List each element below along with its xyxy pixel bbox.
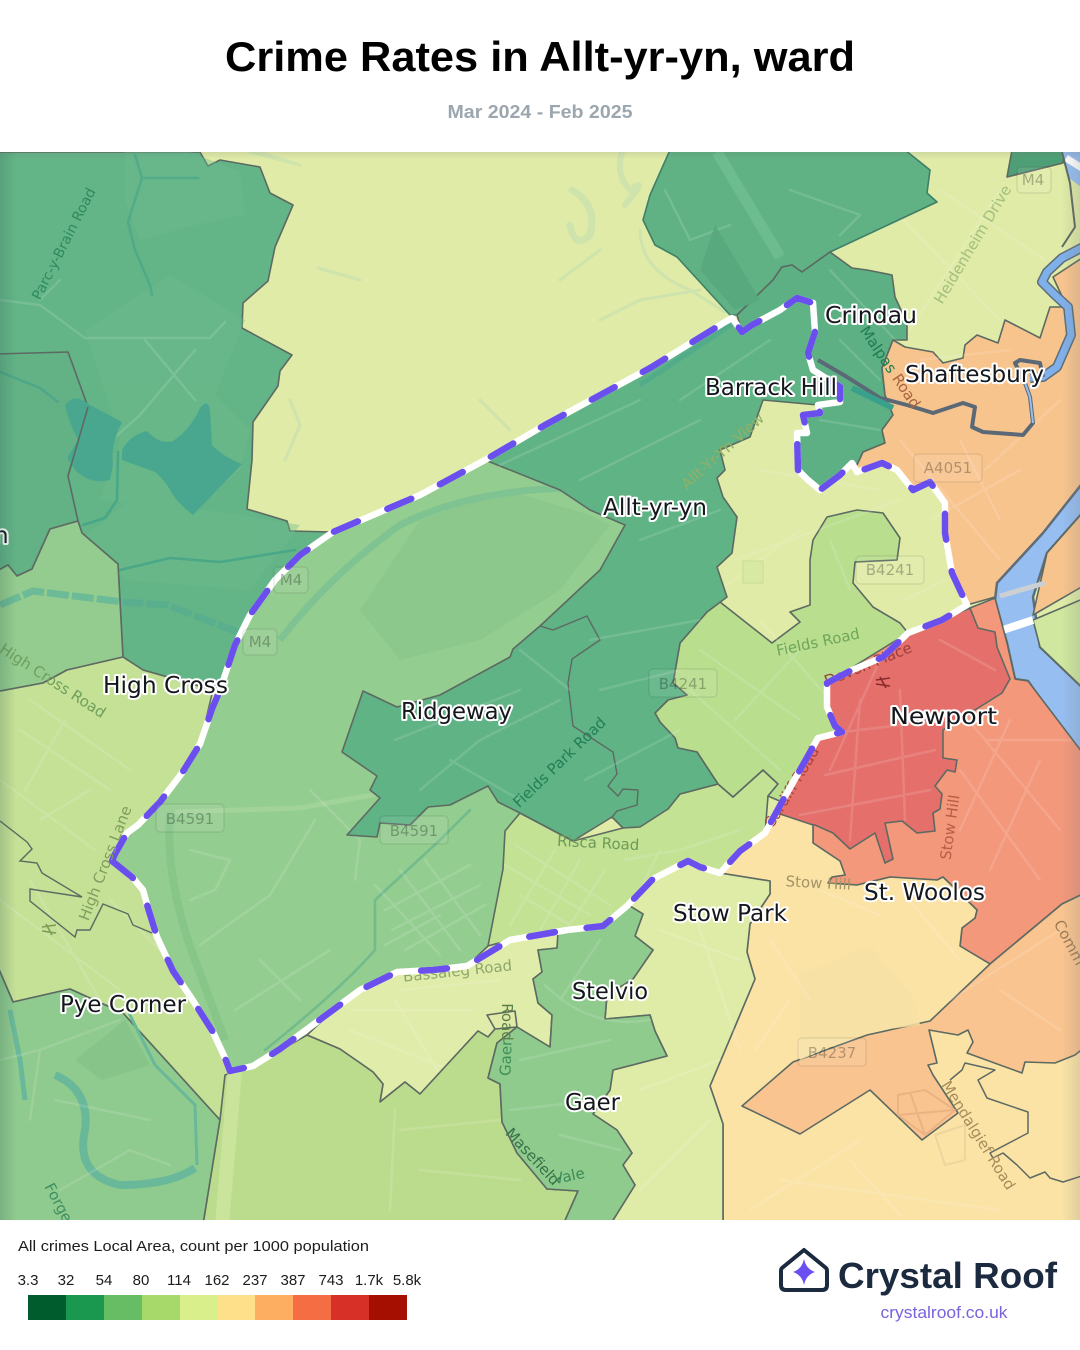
road shields: B4237 xyxy=(808,1044,856,1062)
region: Stow Park pale green xyxy=(593,861,770,1225)
legend tick labels: 1.7k xyxy=(355,1272,384,1289)
brand url: crystalroof.co.uk xyxy=(880,1304,1008,1322)
title: Crime Rates in Allt-yr-yn, ward xyxy=(225,33,855,80)
road label: Bassaleg Road: Bassaleg Road xyxy=(402,956,513,986)
legend tick labels: 237 xyxy=(242,1272,268,1289)
road shields: A4051 xyxy=(924,459,972,477)
place labels: Stelvio xyxy=(572,979,648,1005)
region: Ridgeway inner shading xyxy=(169,488,610,1050)
place labels xyxy=(0,303,1044,1116)
region: Crindau road and streets xyxy=(665,152,900,430)
road shields: B4241 xyxy=(866,561,914,579)
legend tick labels: 3.3 xyxy=(18,1272,38,1289)
road labels under boundary xyxy=(402,639,915,986)
region: south light green xyxy=(203,1027,578,1225)
region: Stelvio and Gaer green xyxy=(488,906,667,1225)
place labels: Newport xyxy=(890,704,997,730)
region: south-west light green High Cross xyxy=(0,521,123,692)
region: Fields Road streets xyxy=(690,540,850,770)
road labels: Forge xyxy=(41,1180,76,1225)
icon: Pye Corner railway station xyxy=(42,924,56,935)
region: St. Woolos salmon xyxy=(780,598,1080,964)
road labels: Stow Hill xyxy=(937,794,964,861)
region: Risca Road streets xyxy=(505,830,740,930)
legend title: All crimes Local Area, count per 1000 population xyxy=(18,1238,369,1255)
legend tick labels: 80 xyxy=(133,1272,149,1289)
region: peach across river xyxy=(1033,510,1080,615)
road labels: Allt-Yr-Yn View xyxy=(678,409,768,493)
region: hidden ward lines High Cross xyxy=(0,821,152,937)
river: upper channel xyxy=(1030,246,1080,378)
region: Stow Park yellow peach xyxy=(710,802,1080,1225)
region: south light road xyxy=(222,1070,235,1225)
legend tick labels: 114 xyxy=(167,1272,191,1289)
region: M4 carriageway over High Cross xyxy=(0,591,123,605)
region: Ridgeway street grid xyxy=(375,860,485,955)
region: lighter patches xyxy=(80,152,300,590)
choropleth map panel xyxy=(0,150,1080,1225)
region: M4 carriageway west xyxy=(123,599,239,635)
legend tick labels: 54 xyxy=(96,1272,112,1289)
region: peach south band xyxy=(742,893,1080,1140)
region: Allt-yr-yn and Ridgeway dark green wards xyxy=(342,298,840,841)
road shields: B4591 xyxy=(166,810,214,828)
legend xyxy=(18,1238,422,1320)
legend colour scale xyxy=(28,1295,407,1320)
road label: Devon Place: Devon Place xyxy=(822,639,915,690)
region: Crindau top dark green xyxy=(643,150,937,315)
region: Shaftesbury streets xyxy=(900,350,1060,560)
place labels: Shaftesbury xyxy=(905,362,1044,388)
region: St. Woolos streets xyxy=(960,710,1070,880)
road labels: Malpas Road xyxy=(856,323,924,412)
region: south street details xyxy=(750,890,1060,1215)
region: Newport red xyxy=(780,608,1010,863)
region: west dark green xyxy=(0,152,333,690)
place labels: Pye Corner xyxy=(60,992,187,1018)
road labels: Road xyxy=(498,1003,516,1041)
legend tick labels xyxy=(18,1272,422,1289)
road shields: M4 xyxy=(280,571,302,589)
road shields xyxy=(156,167,1051,1066)
region: Shaftesbury peach xyxy=(852,256,1080,605)
subtitle: date range: Mar 2024 - Feb 2025 xyxy=(448,102,632,122)
place labels: Gaer xyxy=(565,1090,621,1116)
road labels: Vale xyxy=(552,1164,586,1188)
road labels: Gaer xyxy=(496,1039,516,1076)
bridges xyxy=(1000,583,1045,630)
road shields: M4 xyxy=(1022,171,1044,189)
region: Newport streets xyxy=(800,640,995,840)
road shields: M4 xyxy=(249,633,271,651)
region: Fields Road green xyxy=(655,510,908,802)
region: Ridgeway ward light green xyxy=(112,460,625,1071)
region: west streams and paths xyxy=(0,155,295,570)
road labels: Parc-y-Brain Road xyxy=(29,186,100,303)
region: reservoirs xyxy=(65,398,242,515)
place labels: Allt-yr-yn xyxy=(603,495,707,521)
river: main blue channel xyxy=(995,480,1080,752)
place labels: Stow Park xyxy=(673,901,788,927)
road labels: Masefield xyxy=(502,1124,564,1189)
region: far west green xyxy=(0,352,88,576)
river: tributary canal grey line xyxy=(818,360,1043,435)
place labels: Barrack Hill xyxy=(705,375,837,401)
place labels: St. Woolos xyxy=(864,880,985,906)
region: internal ward line and streets xyxy=(395,322,770,817)
legend tick labels: 162 xyxy=(204,1272,230,1289)
road labels: Stow Hill xyxy=(785,872,851,894)
road labels: Risca Road xyxy=(557,832,640,854)
region: Risca Road mid green xyxy=(488,770,778,946)
region: small square park xyxy=(743,561,763,583)
region: High Cross yellow green xyxy=(0,657,230,1120)
region: pale green across river xyxy=(1033,598,1080,690)
region: north-east corner dark green xyxy=(1007,150,1064,177)
brand name: Crystal Roof xyxy=(838,1255,1058,1296)
road shields: B4241 xyxy=(659,675,707,693)
ward boundary: Allt-yr-yn xyxy=(112,298,967,1071)
legend tick labels: 387 xyxy=(280,1272,306,1289)
road labels: Fields Park Road xyxy=(509,714,610,811)
road labels xyxy=(0,182,1080,1225)
place labels: High Cross xyxy=(103,673,228,699)
region: pale Malpas zone street detail xyxy=(720,175,1045,600)
legend tick labels: 5.8k xyxy=(393,1272,422,1289)
region: High Cross road network xyxy=(0,700,170,1000)
region: ward lines south-east xyxy=(950,1063,1080,1182)
region: M4 motorway through Ridgeway xyxy=(280,488,570,640)
region: Crindau dark green xyxy=(737,252,907,490)
legend tick labels: 32 xyxy=(58,1272,74,1289)
place labels: Ridgeway xyxy=(401,699,512,725)
map edge vignette xyxy=(0,152,1080,1220)
road labels: Fields Road xyxy=(775,624,861,660)
icon: house with star xyxy=(781,1250,827,1290)
road shields: B4591 xyxy=(390,822,438,840)
region: Pye Corner south-west green xyxy=(0,960,220,1225)
icon: Newport railway station xyxy=(876,677,890,688)
place labels: Crindau xyxy=(825,303,917,329)
region: north pale zone paths xyxy=(250,152,725,460)
road labels: Mendalgief Road xyxy=(937,1078,1019,1193)
region: ward line across reservoir xyxy=(68,407,88,476)
road labels: Heidenheim Drive xyxy=(930,182,1015,307)
region: pale zone streets xyxy=(350,900,740,1190)
road labels: High Cross Lane xyxy=(75,803,135,923)
logo: Crystal Roof xyxy=(781,1250,1058,1322)
region: Gaer streets xyxy=(510,940,650,1150)
region: Bassaleg pale xyxy=(307,932,558,1102)
road label: Cardiff Road: Cardiff Road xyxy=(760,743,823,831)
river: top-right corner with road xyxy=(1062,150,1080,247)
legend tick labels: 743 xyxy=(318,1272,344,1289)
region: south-west streams xyxy=(0,1005,197,1190)
